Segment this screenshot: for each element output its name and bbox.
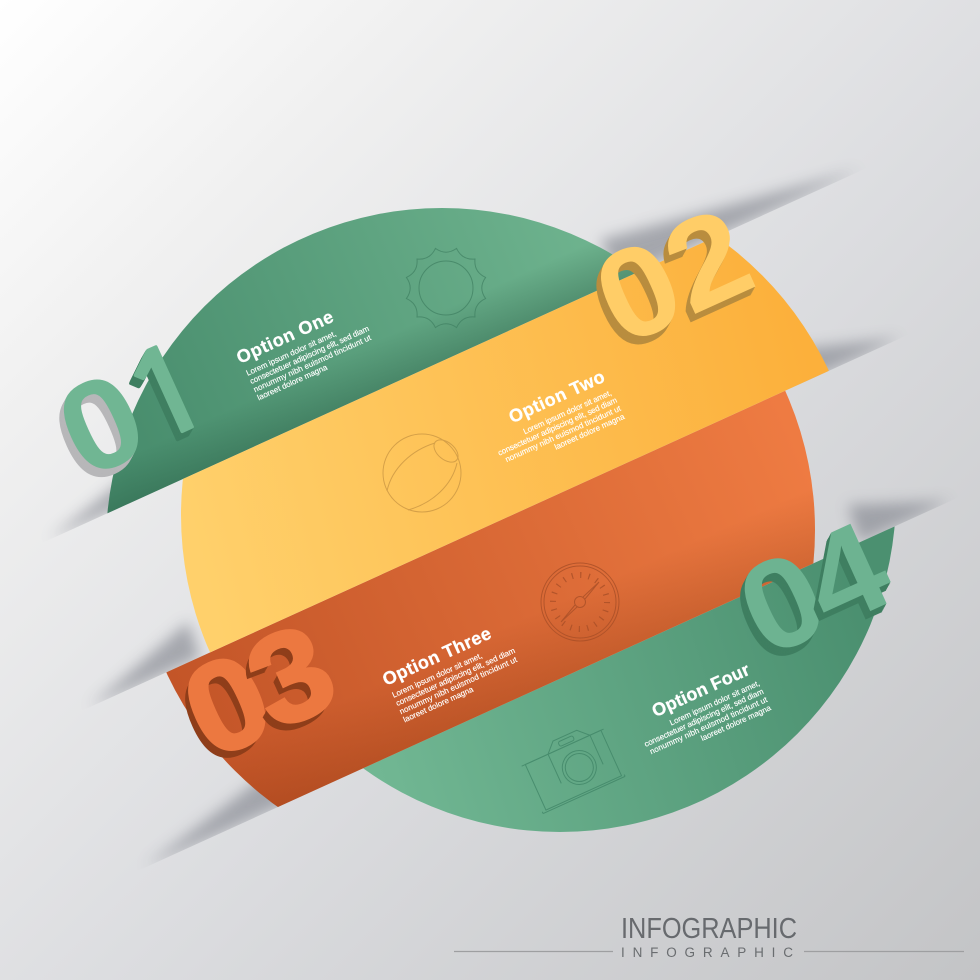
number 01: 1	[106, 323, 229, 465]
text block: option one	[233, 295, 378, 403]
panel: option four green segment	[363, 526, 895, 832]
text block: option one: laoreet dolore magna	[256, 363, 329, 402]
text block: option three: Lorem ipsum dolor sit amet,	[391, 651, 484, 700]
number 03: 0	[163, 625, 291, 786]
number 03	[163, 596, 355, 786]
panel: option one green segment	[107, 208, 634, 514]
number 04	[718, 494, 910, 684]
footer title: INFOGRAPHIC	[621, 913, 797, 945]
text block: option four: laoreet dolore magna	[699, 703, 773, 743]
panel: option two yellow band	[181, 242, 829, 652]
text block: option three: Option Three	[379, 623, 494, 690]
text block: option four: nonummy nibh euismod tincidunt ut	[648, 695, 769, 756]
text block: option one: nonummy nibh euismod tincidunt ut	[252, 333, 373, 394]
text block: option three	[379, 617, 524, 725]
icon: compass	[541, 563, 619, 641]
number 02	[574, 178, 778, 372]
text block: option one: Lorem ipsum dolor sit amet,	[245, 329, 338, 378]
icon: camera	[518, 720, 625, 814]
panel: option three orange band	[166, 390, 815, 807]
number 02: 0	[574, 209, 709, 372]
text block: option two: Lorem ipsum dolor sit amet,	[522, 388, 613, 436]
footer title	[454, 913, 964, 960]
slit shadows	[50, 170, 950, 867]
number 01	[37, 323, 229, 505]
text block: option three: consectetuer adipiscing elit, sed diam	[394, 646, 517, 708]
number 01: 0	[37, 344, 166, 505]
text block: option four: Lorem ipsum dolor sit amet,	[668, 679, 761, 727]
text block: option one: consectetuer adipiscing elit, sed diam	[248, 324, 371, 386]
number 04: 0	[718, 523, 846, 684]
text block: option three: laoreet dolore magna	[402, 685, 475, 724]
text block: option two: Option Two	[506, 366, 608, 427]
text block: option two: laoreet dolore magna	[553, 412, 626, 452]
text block: option four: Option Four	[649, 659, 753, 721]
text block: option two	[483, 365, 627, 474]
text block: option three: nonummy nibh euismod tincidunt ut	[398, 655, 519, 716]
text block: option four	[630, 657, 773, 765]
text block: option two: consectetuer adipiscing elit, sed diam	[496, 396, 619, 458]
icon: beach ball	[383, 434, 462, 512]
number 04: 4	[782, 494, 910, 655]
text block: option two: nonummy nibh euismod tincidunt ut	[504, 404, 623, 464]
number 03: 3	[227, 596, 355, 757]
text block: option four: consectetuer adipiscing elit, sed diam	[643, 687, 765, 749]
text block: option one: Option One	[233, 306, 336, 368]
icon: sun	[406, 248, 486, 328]
number 02: 2	[643, 178, 778, 341]
footer title: INFOGRAPHIC	[621, 945, 793, 960]
